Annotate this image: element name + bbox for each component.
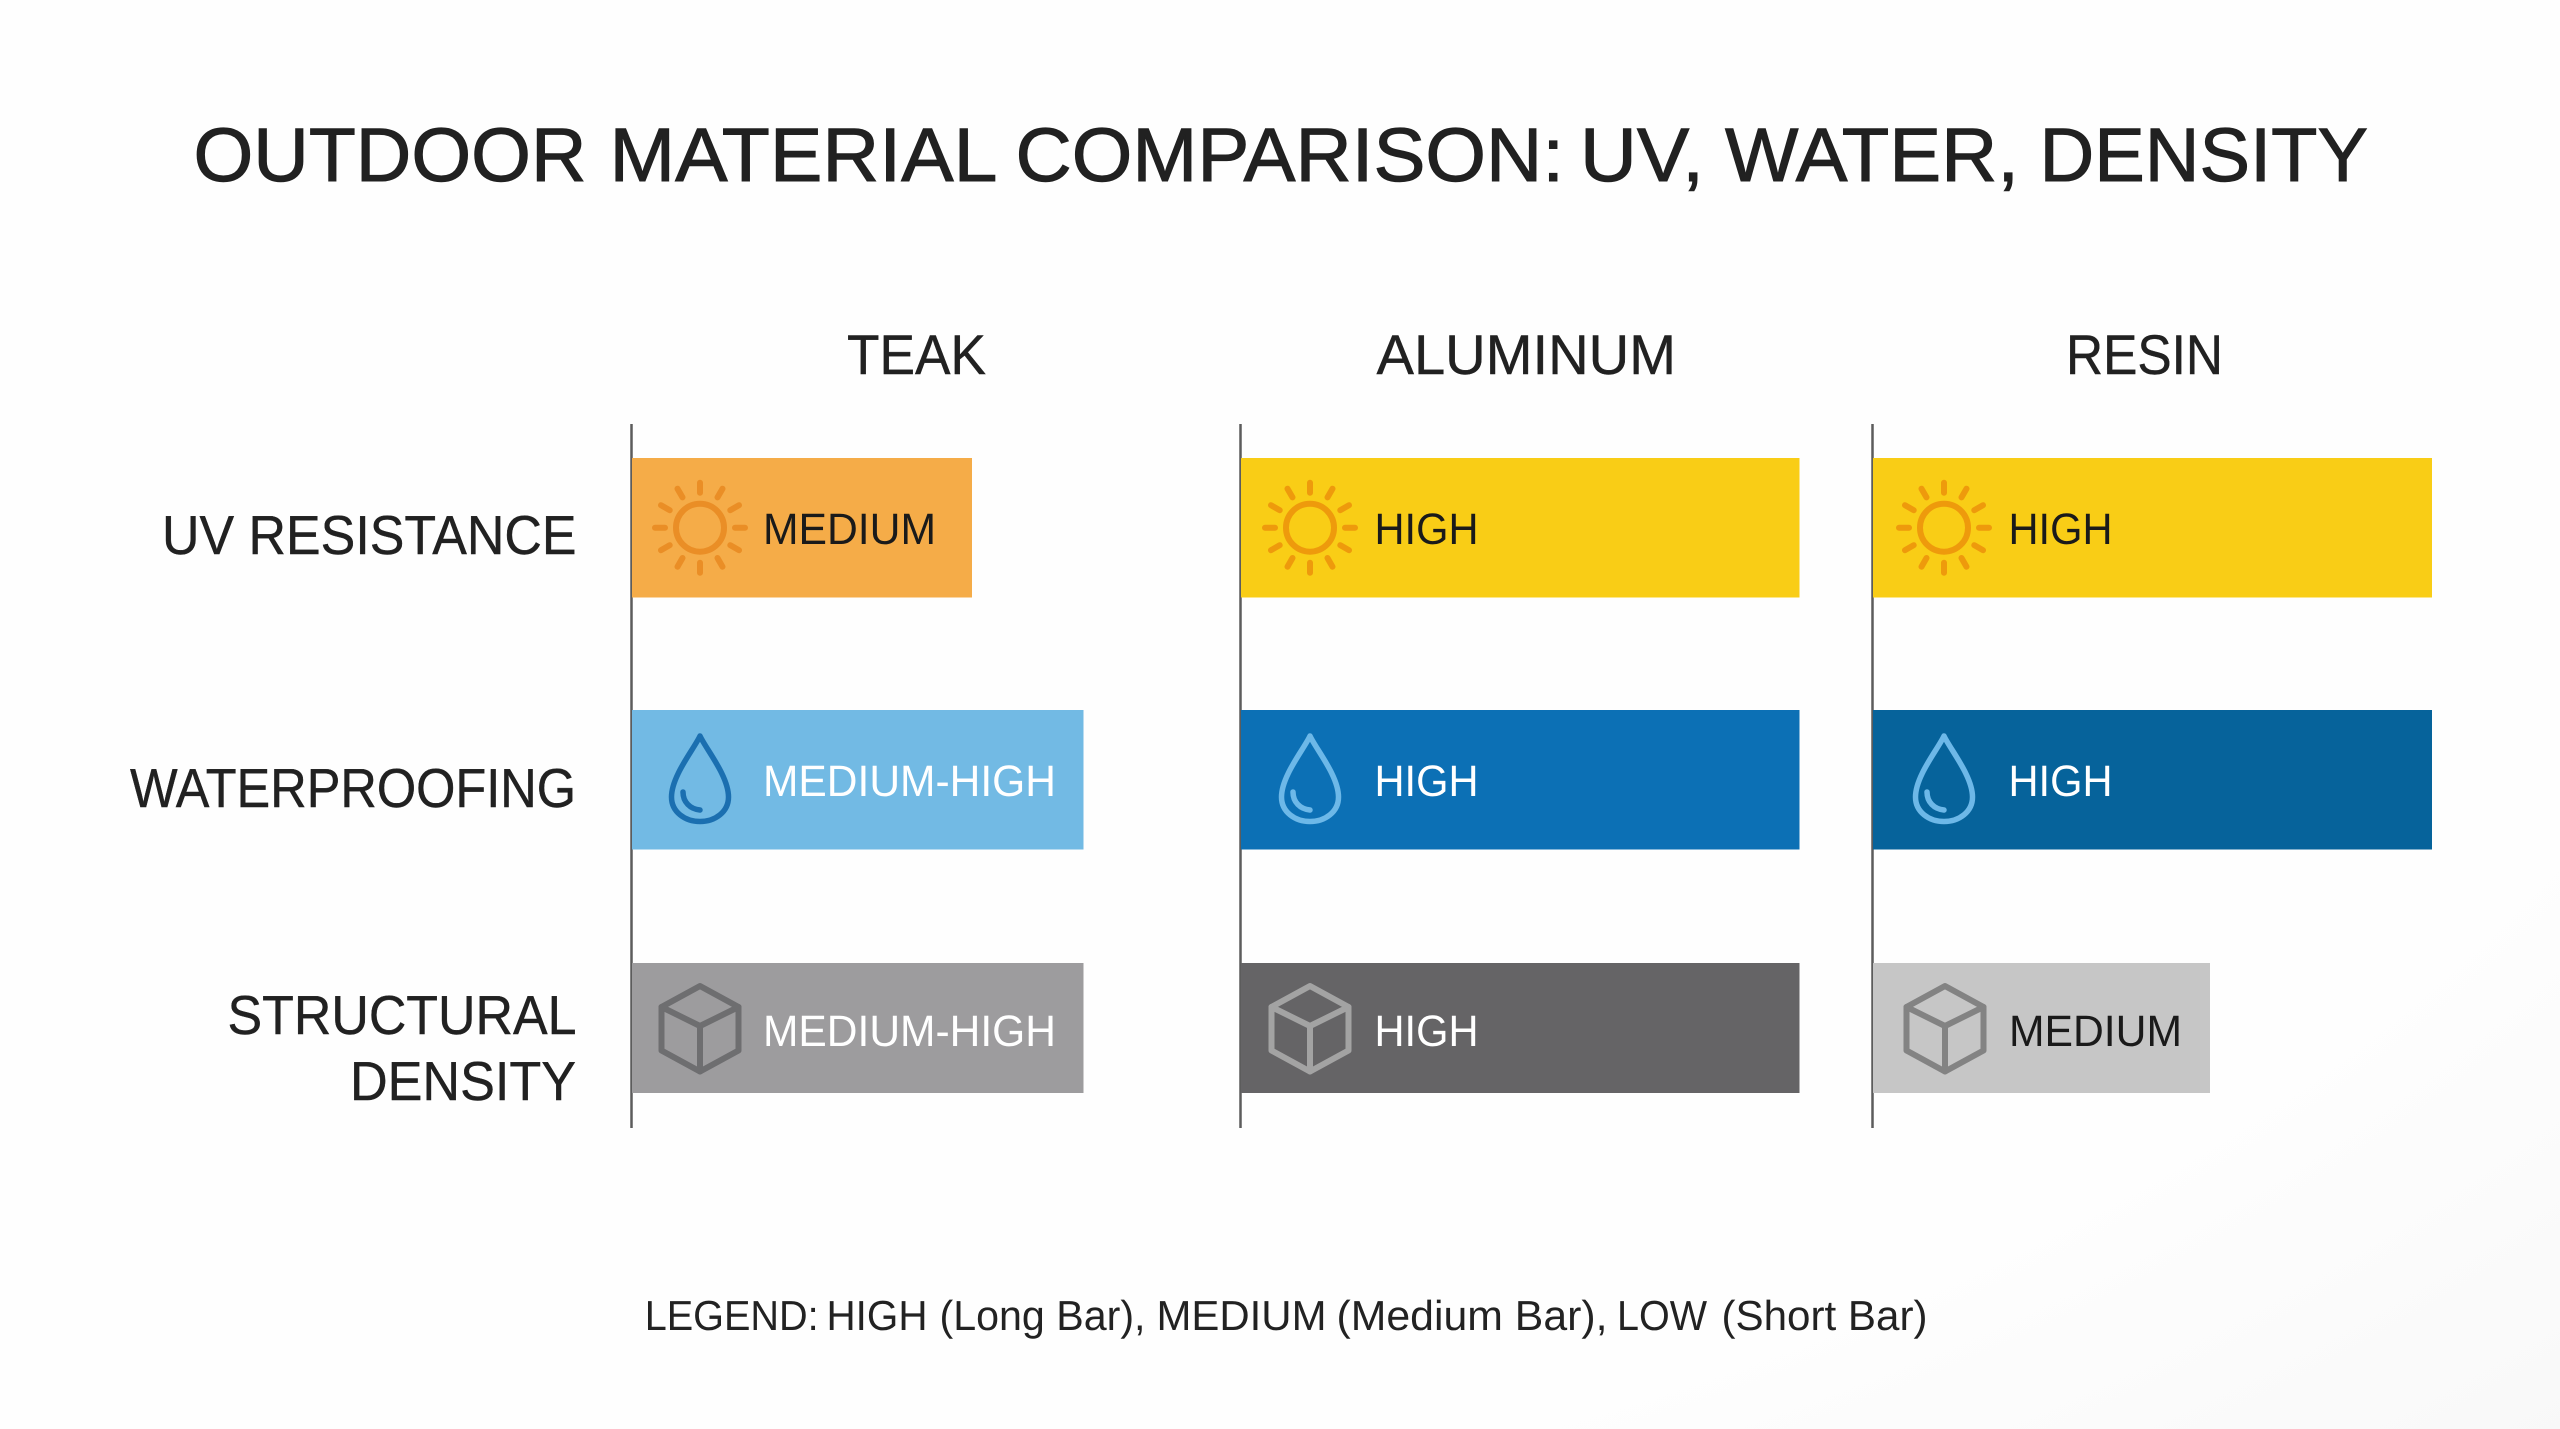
row labels <box>130 504 576 1112</box>
row label: structural density: DENSITY <box>350 1050 576 1112</box>
legend: (Medium Bar), <box>1336 1292 1608 1339</box>
column heading: teak: TEAK <box>847 323 986 386</box>
bar: teak density medium-high <box>632 963 1084 1093</box>
value: MEDIUM-HIGH <box>763 757 1056 806</box>
bar: aluminum density high <box>1241 963 1800 1093</box>
legend: LOW <box>1617 1292 1707 1339</box>
value: HIGH <box>1374 505 1478 554</box>
row label: structural density: STRUCTURAL <box>228 984 576 1046</box>
panel: teak column <box>632 323 1084 1128</box>
icon: cube <box>1906 986 1984 1072</box>
column heading: aluminum: ALUMINUM <box>1376 323 1676 386</box>
icon: water drop <box>672 736 728 822</box>
value: MEDIUM-HIGH <box>763 1007 1056 1056</box>
icon: sun <box>1265 483 1355 573</box>
legend: LEGEND: <box>645 1292 819 1339</box>
bar: teak water medium-high <box>632 710 1084 850</box>
icon: sun <box>1899 483 1989 573</box>
value: MEDIUM <box>2009 1007 2182 1056</box>
title: COMPARISON: <box>1016 113 1564 198</box>
bar: resin water high <box>1873 710 2432 850</box>
bar: resin UV high <box>1873 458 2432 598</box>
icon: sun <box>655 483 745 573</box>
value: HIGH <box>2008 505 2112 554</box>
icon: cube <box>1272 986 1348 1072</box>
legend: MEDIUM <box>1156 1292 1326 1339</box>
title: UV, <box>1580 113 1704 198</box>
value: MEDIUM <box>763 505 936 554</box>
column heading: resin: RESIN <box>2066 323 2223 386</box>
icon: water drop <box>1282 736 1338 822</box>
title: WATER, <box>1725 113 2019 198</box>
icon: water drop <box>1916 736 1972 822</box>
bar: resin density medium <box>1873 963 2210 1093</box>
title: OUTDOOR <box>194 113 586 198</box>
icon: cube <box>662 986 738 1072</box>
row label: waterproofing: WATERPROOFING <box>130 757 576 819</box>
value: HIGH <box>1374 757 1478 806</box>
legend: (Long Bar), <box>940 1292 1146 1339</box>
title: DENSITY <box>2040 113 2368 198</box>
value: HIGH <box>2008 757 2112 806</box>
legend: HIGH <box>826 1292 928 1339</box>
panel: resin column <box>1872 323 2432 1128</box>
row label: UV resistance: UV RESISTANCE <box>162 504 576 566</box>
bar: teak UV medium <box>632 458 972 598</box>
bar: aluminum UV high <box>1241 458 1800 598</box>
title: MATERIAL <box>610 113 995 198</box>
value: HIGH <box>1374 1007 1478 1056</box>
panel: aluminum column <box>1240 323 1800 1128</box>
row label: structural density <box>228 984 576 1112</box>
legend: (Short Bar) <box>1722 1292 1928 1339</box>
bar: aluminum water high <box>1241 710 1800 850</box>
